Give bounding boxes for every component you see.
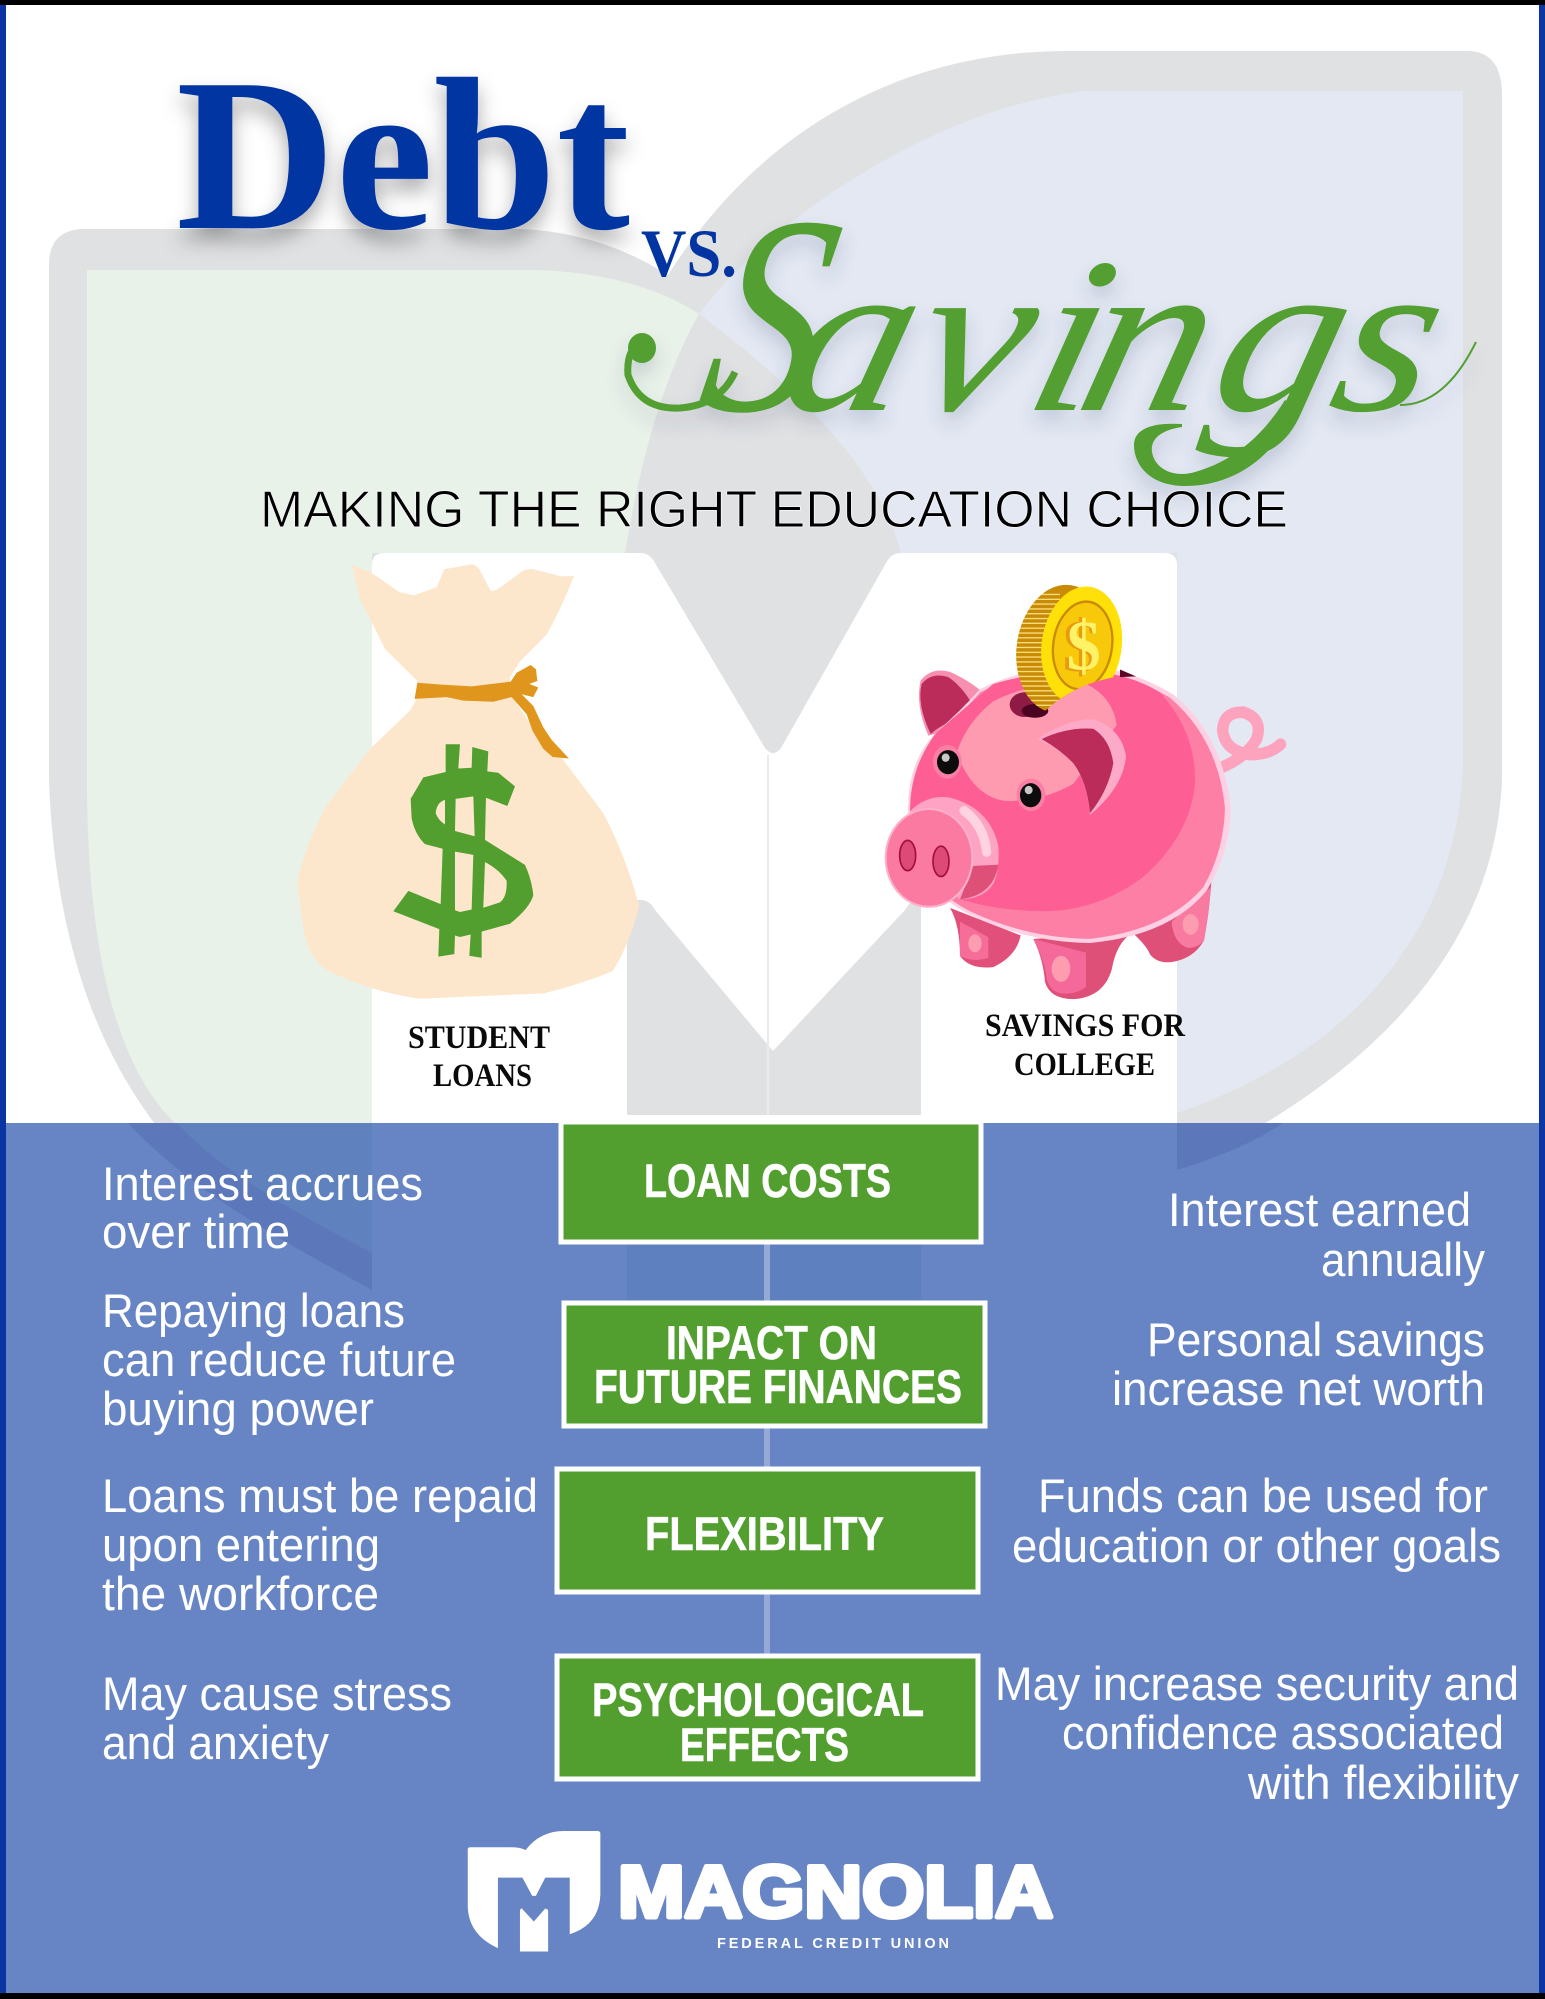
text: savings flexibility (1012, 1469, 1501, 1572)
icon: money bag (297, 564, 639, 999)
text: debt flexibility: the workforce (102, 1567, 379, 1620)
front ear (1038, 719, 1126, 815)
label: student loans (408, 1020, 550, 1094)
text: debt psychological (102, 1667, 452, 1769)
text: savings interest: annually (1321, 1233, 1485, 1286)
text: savings net worth: increase net worth (1112, 1362, 1485, 1415)
text: savings psychological (995, 1657, 1519, 1809)
label: savings for college (985, 1008, 1186, 1083)
text: debt future finances: can reduce future (102, 1333, 456, 1386)
title: Savings: S (683, 158, 860, 472)
text: debt future finances: Repaying loans (102, 1284, 405, 1337)
title: Savings (628, 158, 1476, 486)
text: savings flexibility: education or other goals (1012, 1519, 1501, 1572)
label: savings for college: SAVINGS FOR (985, 1008, 1186, 1044)
title: Savings: s (1313, 212, 1471, 458)
box: flexibility (557, 1469, 978, 1592)
text: debt psychological: and anxiety (102, 1716, 329, 1769)
title: vs.: VS. (641, 215, 737, 291)
panel: blue comparison area (0, 1123, 1545, 1993)
box: impact on future finances (564, 1303, 985, 1426)
coin: $ (1067, 608, 1101, 686)
coin (1016, 584, 1122, 711)
box: psychological effects: EFFECTS (680, 1718, 849, 1771)
title: Savings: v (893, 212, 1066, 458)
box: psychological effects: PSYCHOLOGICAL (592, 1673, 924, 1726)
box: psychological effects (557, 1656, 978, 1779)
title: Savings: a (763, 212, 949, 458)
text: savings psychological: with flexibility (1247, 1756, 1519, 1809)
title: Savings: n (1060, 212, 1245, 458)
text: debt loan costs: Interest accrues (102, 1157, 423, 1210)
back ear (919, 671, 991, 736)
coin slot (1010, 670, 1136, 718)
wordmark: MAGNOLIA (618, 1852, 1053, 1933)
body (908, 665, 1231, 943)
icon: piggy bank with coin (886, 578, 1281, 999)
coin: $ (1063, 605, 1098, 687)
text: savings psychological: May increase security and (995, 1657, 1519, 1710)
box: impact on future finances: FUTURE FINANCES (594, 1360, 962, 1413)
snout (886, 797, 999, 907)
text: savings psychological: confidence associated (1062, 1706, 1504, 1759)
box: flexibility: FLEXIBILITY (645, 1507, 884, 1560)
watermark: Magnolia shield logo (49, 51, 1502, 1290)
tail (1223, 712, 1281, 767)
label: student loans: STUDENT (408, 1020, 550, 1056)
eyes (933, 745, 1045, 811)
tagline: FEDERAL CREDIT UNION (717, 1936, 949, 1952)
logo mark (468, 1831, 600, 1952)
legs (950, 877, 1212, 999)
text: debt flexibility: upon entering (102, 1518, 380, 1571)
text: debt loan costs (102, 1157, 423, 1258)
title: Savings: g (1193, 212, 1379, 458)
text: debt flexibility: Loans must be repaid (102, 1469, 538, 1522)
text: debt psychological: May cause stress (102, 1667, 452, 1720)
text: savings net worth (1112, 1313, 1485, 1415)
text: savings net worth: Personal savings (1147, 1313, 1485, 1366)
text: savings interest: Interest earned (1168, 1183, 1471, 1236)
box: impact on future finances: INPACT ON (666, 1316, 877, 1369)
box: loan costs: LOAN COSTS (644, 1154, 891, 1207)
connector line (764, 1240, 770, 1660)
text: debt future finances: buying power (102, 1382, 374, 1435)
text: savings interest (1168, 1183, 1485, 1286)
subtitle: MAKING THE RIGHT EDUCATION CHOICE (260, 481, 1288, 539)
text: debt loan costs: over time (102, 1205, 290, 1258)
title: Savings: i (1008, 212, 1139, 458)
label: savings for college: COLLEGE (1014, 1047, 1155, 1083)
logo: Magnolia (468, 1831, 1053, 1952)
box: loan costs (561, 1122, 981, 1242)
label: student loans: LOANS (433, 1058, 532, 1094)
head patch (957, 683, 1117, 801)
text: debt flexibility (102, 1469, 538, 1620)
text: savings flexibility: Funds can be used for (1038, 1469, 1488, 1522)
text: debt future finances (102, 1284, 456, 1435)
title: Debt: Debt (176, 35, 630, 276)
